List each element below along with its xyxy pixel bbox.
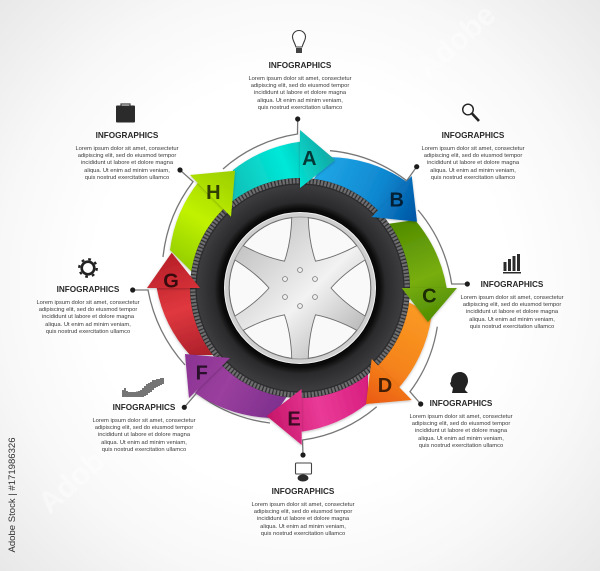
text block F: Lorem ipsum dolor sit amet, consectetur <box>92 418 196 424</box>
icon: briefcase <box>116 104 135 122</box>
text: Adobe Stock <box>32 373 191 520</box>
text: Stock <box>429 327 512 406</box>
text block H: aliqua. Ut enim ad minim veniam, <box>84 168 170 174</box>
text block D: Lorem ipsum dolor sit amet, consectetur <box>409 414 513 420</box>
text block E <box>251 487 355 537</box>
text block G: Lorem ipsum dolor sit amet, consectetur <box>36 300 140 306</box>
icon: light bulb <box>292 31 306 53</box>
arrow letters: E <box>287 408 301 430</box>
arrow E head <box>267 389 302 445</box>
text block A <box>248 61 352 111</box>
text block B <box>421 131 525 181</box>
text block F: incididunt ut labore et dolore magna <box>98 432 190 438</box>
arrow letters: A <box>302 148 317 170</box>
text block D: adipiscing elit, sed do eiusmod tempor <box>412 421 510 427</box>
text block A: aliqua. Ut enim ad minim veniam, <box>257 98 343 104</box>
text block E: Lorem ipsum dolor sit amet, consectetur <box>251 502 355 508</box>
text block C: Lorem ipsum dolor sit amet, consectetur <box>460 294 564 300</box>
icon: bar chart <box>503 254 521 274</box>
tire <box>190 178 410 398</box>
arrow letters: B <box>389 190 404 212</box>
arrow letters <box>163 148 437 430</box>
text block H: incididunt ut labore et dolore magna <box>81 160 173 166</box>
arrow C head <box>402 288 457 322</box>
text block H <box>75 131 179 181</box>
icon: monitor <box>296 463 312 482</box>
text block F <box>92 403 196 453</box>
arrow bodies ring <box>157 142 447 432</box>
icon: gear <box>79 259 97 277</box>
arrow letters: H <box>206 182 221 204</box>
text block F: aliqua. Ut enim ad minim veniam, <box>101 440 187 446</box>
text block G: quis nostrud exercitation ullamco <box>46 329 130 335</box>
connector lines and dots <box>130 116 470 458</box>
text block A: quis nostrud exercitation ullamco <box>258 105 342 111</box>
text block B: adipiscing elit, sed do eiusmod tempor <box>424 153 522 159</box>
text block G: adipiscing elit, sed do eiusmod tempor <box>39 307 137 313</box>
text block H: quis nostrud exercitation ullamco <box>85 175 169 181</box>
text block C <box>460 280 564 330</box>
arrow heads <box>147 130 457 445</box>
text block G <box>36 285 140 335</box>
text block A: adipiscing elit, sed do eiusmod tempor <box>251 83 349 89</box>
text block B: quis nostrud exercitation ullamco <box>431 175 515 181</box>
text block B: aliqua. Ut enim ad minim veniam, <box>430 168 516 174</box>
text block D <box>409 399 513 449</box>
text block C: INFOGRAPHICS <box>481 280 543 289</box>
icon: magnifier <box>463 104 479 121</box>
text block F: INFOGRAPHICS <box>113 403 175 412</box>
text block D: aliqua. Ut enim ad minim veniam, <box>418 436 504 442</box>
arrow H head <box>190 171 235 217</box>
text block G: aliqua. Ut enim ad minim veniam, <box>45 322 131 328</box>
arrow D head <box>366 359 412 404</box>
arrow letters: G <box>163 270 179 292</box>
icon: rising chart <box>123 378 163 397</box>
text block E: INFOGRAPHICS <box>272 487 334 496</box>
text block A: INFOGRAPHICS <box>269 61 331 70</box>
text block G: INFOGRAPHICS <box>57 285 119 294</box>
icon: head silhouette <box>450 372 468 393</box>
text block F: quis nostrud exercitation ullamco <box>102 447 186 453</box>
text block H: Lorem ipsum dolor sit amet, consectetur <box>75 146 179 152</box>
arrow letters: C <box>422 286 437 308</box>
text block G: incididunt ut labore et dolore magna <box>42 314 134 320</box>
text block F: adipiscing elit, sed do eiusmod tempor <box>95 425 193 431</box>
wheel <box>190 178 410 398</box>
text block E: aliqua. Ut enim ad minim veniam, <box>260 524 346 530</box>
text block A: Lorem ipsum dolor sit amet, consectetur <box>248 76 352 82</box>
arrow F head <box>185 354 230 398</box>
text block D: incididunt ut labore et dolore magna <box>415 428 507 434</box>
arrow G head <box>147 253 200 288</box>
text block E: quis nostrud exercitation ullamco <box>261 531 345 537</box>
text block C: adipiscing elit, sed do eiusmod tempor <box>463 302 561 308</box>
text block E: incididunt ut labore et dolore magna <box>257 516 349 522</box>
text block H: adipiscing elit, sed do eiusmod tempor <box>78 153 176 159</box>
text block D: INFOGRAPHICS <box>430 399 492 408</box>
arrow letters: D <box>378 375 392 397</box>
text block C: quis nostrud exercitation ullamco <box>470 324 554 330</box>
text block H: INFOGRAPHICS <box>96 131 158 140</box>
arrow B head <box>372 176 417 222</box>
text block C: incididunt ut labore et dolore magna <box>466 309 558 315</box>
text block A: incididunt ut labore et dolore magna <box>254 90 346 96</box>
arrow A head <box>300 130 335 188</box>
text block B: incididunt ut labore et dolore magna <box>427 160 519 166</box>
text block D: quis nostrud exercitation ullamco <box>419 443 503 449</box>
text: Adobe <box>411 0 502 85</box>
text block C: aliqua. Ut enim ad minim veniam, <box>469 317 555 323</box>
text block B: Lorem ipsum dolor sit amet, consectetur <box>421 146 525 152</box>
arrow letters: F <box>196 362 208 384</box>
stock credit: Adobe Stock | #171986326 <box>7 438 18 553</box>
text block E: adipiscing elit, sed do eiusmod tempor <box>254 509 352 515</box>
rim <box>223 211 377 365</box>
text block B: INFOGRAPHICS <box>442 131 504 140</box>
